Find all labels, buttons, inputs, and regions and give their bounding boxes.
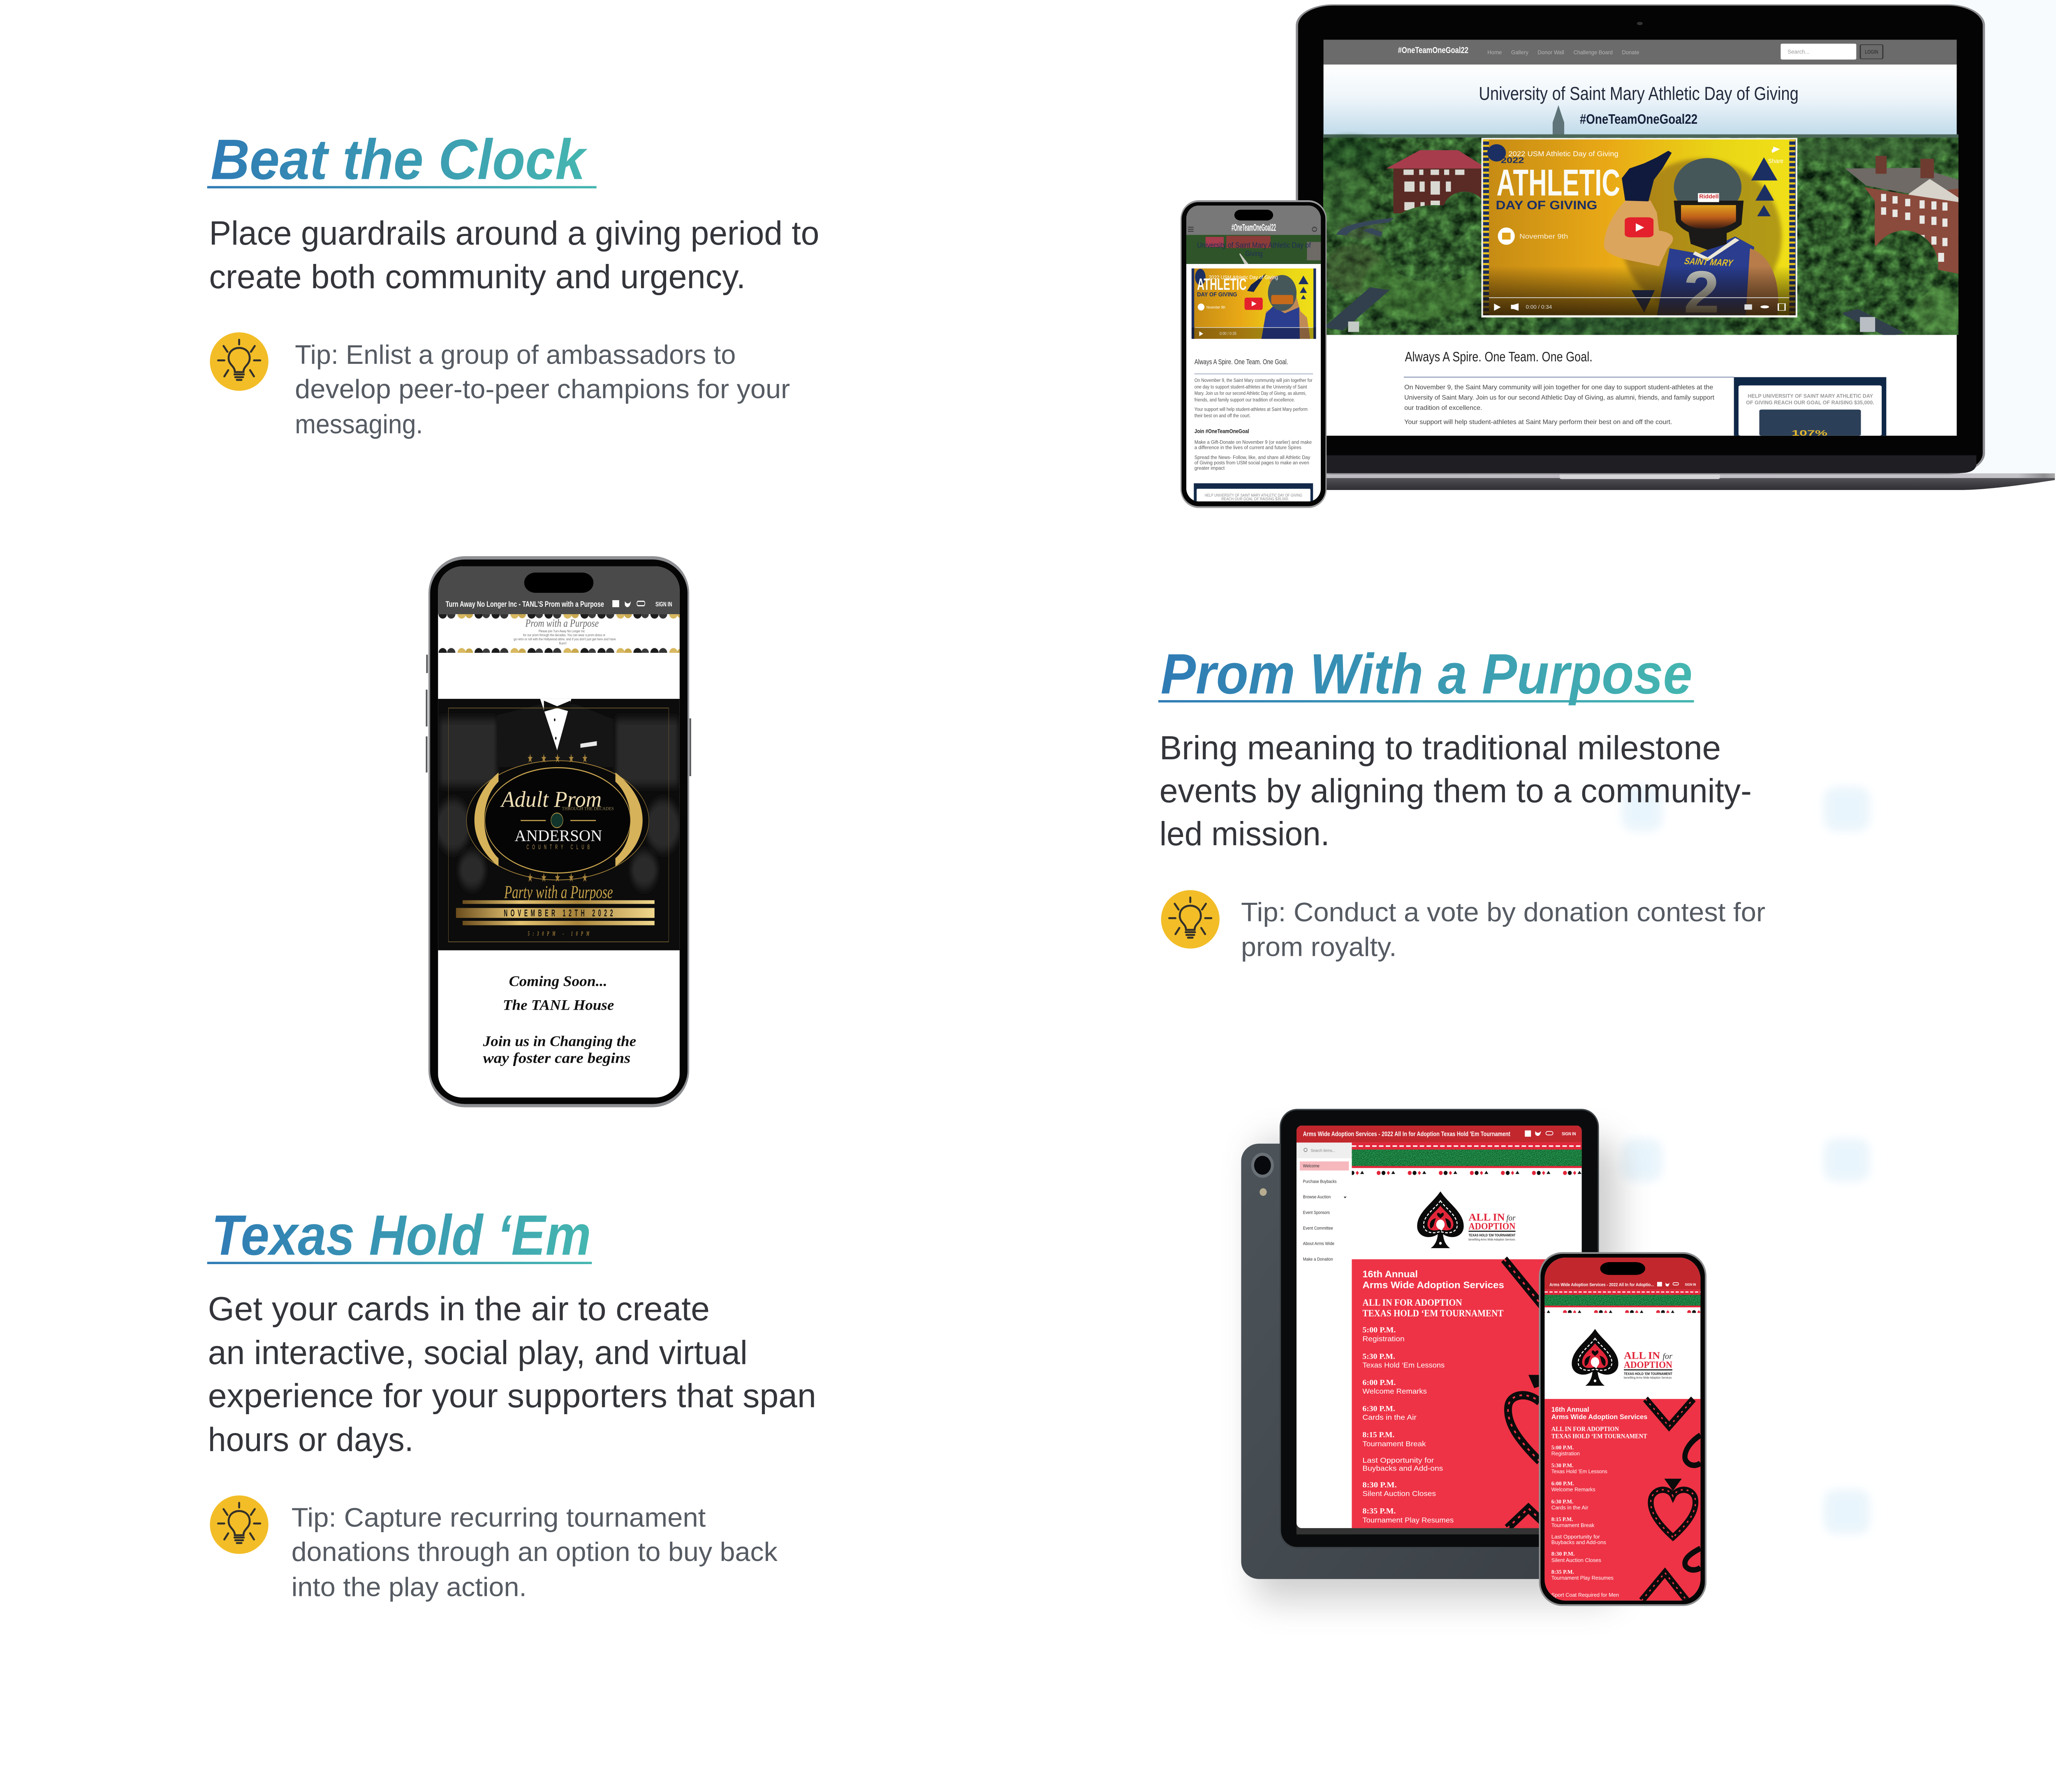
sidebar: About Arms Wide: [1303, 1241, 1334, 1246]
coming soon text: Join us in Changing the: [482, 1034, 637, 1050]
promo video player: 0:00 / 0:34: [1526, 304, 1552, 310]
website nav bar: Home: [1487, 49, 1502, 55]
body text: [208, 1290, 816, 1458]
mobile copy: greater impact: [1195, 466, 1225, 471]
left brick building: [1342, 150, 1482, 236]
event schedule panel: 8:30 P.M.: [1362, 1480, 1397, 1489]
front phone screen: [1544, 1258, 1700, 1600]
prom poster: Party with a Purpose: [504, 881, 613, 902]
decorative blue blur blob: [1622, 787, 1869, 1534]
page copy: On November 9, the Saint Mary community will join together for one day to support student-athletes at the: [1404, 384, 1713, 391]
player controls: [1489, 297, 1789, 298]
body text: an interactive, social play, and virtual: [208, 1334, 748, 1371]
phone logo: [1572, 1329, 1672, 1386]
icon: lightbulb: [1161, 890, 1220, 948]
event schedule panel: 8:35 P.M.: [1362, 1507, 1396, 1516]
gold ring emblem: ANDERSON: [514, 826, 602, 844]
body text: [209, 215, 819, 296]
mobile copy: Spread the News- Follow, like, and share all Athletic Day: [1195, 455, 1310, 460]
phone schedule panel: 6:30 P.M.: [1551, 1498, 1573, 1505]
dynamic island: [1600, 1262, 1645, 1275]
balloon banner: Prom with a Purpose: [525, 617, 599, 629]
gold ring emblem: ★★★★★: [527, 751, 588, 765]
triangles: [1632, 157, 1778, 312]
gold ring emblem: [467, 751, 649, 885]
hero sky and title: #OneTeamOneGoal22: [1580, 111, 1697, 127]
icon: lightbulb: [210, 332, 269, 391]
laptop mockup: [1297, 5, 2055, 490]
coming soon text: The TANL House: [503, 997, 614, 1013]
mobile video: 0:00 / 0:35: [1220, 331, 1236, 336]
tablet screen: [1297, 1126, 1582, 1528]
phone logo: for: [1662, 1352, 1672, 1361]
event schedule panel: Welcome Remarks: [1362, 1387, 1427, 1395]
mobile copy: Mary. Join us for our second Athletic Day of Giving, as alumni,: [1195, 391, 1306, 396]
icon: lightbulb: [210, 1496, 269, 1554]
football player: Riddell: [1699, 193, 1719, 200]
gold ring emblem: COUNTRY CLUB: [526, 843, 590, 851]
event schedule panel: ALL IN FOR ADOPTION: [1362, 1297, 1462, 1308]
heading underline: [207, 1262, 592, 1264]
website nav bar: LOGIN: [1865, 49, 1878, 55]
section: Beat the Clock: [207, 128, 819, 439]
event schedule panel: Last Opportunity for: [1362, 1456, 1434, 1464]
phone schedule panel: Tournament Break: [1551, 1522, 1595, 1528]
All In for Adoption logo: [1417, 1191, 1516, 1248]
mobile copy: Always A Spire. One Team. One Goal.: [1195, 358, 1288, 366]
body text: led mission.: [1160, 815, 1329, 853]
tip text: into the play action.: [292, 1572, 527, 1602]
foreground tree canopy: [1380, 171, 1938, 329]
event schedule panel: 6:30 P.M.: [1362, 1404, 1395, 1413]
page copy: HELP UNIVERSITY OF SAINT MARY ATHLETIC DAY: [1748, 393, 1873, 399]
mobile copy: HELP UNIVERSITY OF SAINT MARY ATHLETIC DAY OF GIVING: [1205, 493, 1302, 497]
prom poster: 5:30PM - 10PM: [528, 930, 589, 937]
event schedule panel: [1352, 1259, 1582, 1528]
promo video player: ATHLETIC: [1497, 162, 1620, 203]
date ribbon: NOVEMBER 12TH 2022: [504, 908, 613, 919]
event schedule panel: 5:00 P.M.: [1362, 1325, 1396, 1334]
phone schedule panel: Buybacks and Add-ons: [1551, 1540, 1606, 1545]
tip text: donations through an option to buy back: [292, 1537, 778, 1567]
phone logo: ALL IN: [1624, 1350, 1660, 1362]
promo video player: 2022 USM Athletic Day of Giving: [1508, 150, 1618, 158]
phone schedule panel: Cards in the Air: [1551, 1505, 1588, 1511]
felt banner: [1297, 1142, 1582, 1177]
heading: Texas Hold 'Em: Texas Hold ‘Em: [211, 1204, 591, 1267]
mobile video: DAY OF GIVING: [1197, 291, 1237, 298]
event schedule panel: 16th Annual: [1362, 1269, 1418, 1279]
phone schedule panel: ALL IN FOR ADOPTION: [1551, 1425, 1619, 1433]
phone schedule panel: Texas Hold ‘Em Lessons: [1551, 1468, 1607, 1474]
mobile video: [1192, 268, 1316, 339]
phone header: Arms Wide Adoption Services - 2022 All In for Adoptio...: [1549, 1282, 1654, 1288]
campus photo: [1312, 134, 1963, 336]
mobile copy: one day to support student-athletes at the University of Saint: [1195, 384, 1307, 390]
body text: events by aligning them to a community-: [1160, 772, 1752, 810]
promo video player: [1482, 138, 1797, 325]
phone schedule panel: Registration: [1551, 1451, 1580, 1457]
phone logo: TEXAS HOLD 'EM TOURNAMENT: [1624, 1372, 1672, 1376]
tablet header: [1297, 1126, 1582, 1142]
mobile copy: a difference in the lives of current and future Spires: [1195, 445, 1301, 451]
tip text: Tip: Capture recurring tournament: [292, 1503, 706, 1532]
tip text: [292, 1503, 778, 1602]
football player: [1604, 151, 1782, 325]
sidebar: Browse Auction: [1303, 1195, 1331, 1200]
body text: hours or days.: [208, 1421, 414, 1458]
event schedule panel: Texas Hold ‘Em Lessons: [1362, 1361, 1445, 1369]
body text: experience for your supporters that span: [208, 1377, 816, 1415]
front phone body: [1540, 1253, 1706, 1605]
tablet front: [1280, 1110, 1598, 1548]
phone schedule panel: 8:30 P.M.: [1551, 1551, 1574, 1557]
balloon banner: [438, 614, 680, 653]
hero sky and title: [1324, 65, 1957, 139]
page copy: 107%: [1792, 428, 1827, 437]
body text: Get your cards in the air to create: [208, 1290, 710, 1328]
All In for Adoption logo: ADOPTION: [1468, 1221, 1516, 1232]
balloon banner: for our prom through the decades. You can wear a prom dress or: [523, 634, 606, 637]
nav bar: Turn Away No Longer Inc - TANL'S Prom with a Purpose: [446, 600, 604, 609]
All In for Adoption logo: benefiting Arms Wide Adoption Services: [1468, 1237, 1515, 1242]
sidebar: Event Sponsors: [1303, 1210, 1330, 1215]
website nav bar: Donate: [1622, 49, 1639, 55]
phone schedule panel: Sport Coat Required for Men: [1551, 1592, 1619, 1598]
heading underline: [207, 186, 597, 188]
tuxedo: [497, 699, 614, 767]
football player: SAINT MARY: [1683, 256, 1734, 268]
promo video player: Share: [1768, 157, 1783, 164]
page copy: OF GIVING REACH OUR GOAL OF RAISING $35,000.: [1746, 399, 1874, 405]
pale blue backdrop beside laptop: [1951, 0, 2056, 474]
tip text: [295, 340, 790, 439]
right brick building: [1333, 156, 1959, 335]
mobile hero: [1186, 235, 1321, 264]
phone screen: [1186, 206, 1321, 503]
balloon banner: fun!: [559, 642, 567, 645]
nav bar: SIGN IN: [655, 601, 672, 608]
sidebar: Search items...: [1311, 1149, 1335, 1153]
event schedule panel: Registration: [1362, 1334, 1405, 1343]
mobile hero: Giving: [1245, 250, 1263, 258]
phone schedule panel: 16th Annual: [1551, 1406, 1589, 1413]
mobile copy: Make a Gift-Donate on November 9 (or earlier) and make: [1195, 440, 1312, 445]
event schedule panel: Silent Auction Closes: [1362, 1489, 1436, 1498]
event schedule panel: Tournament Play Resumes: [1362, 1516, 1454, 1524]
phone schedule panel: Welcome Remarks: [1551, 1487, 1595, 1492]
coming soon text: Coming Soon...: [509, 973, 607, 990]
page copy: Always A Spire. One Team. One Goal.: [1405, 349, 1593, 365]
event schedule panel: Arms Wide Adoption Services: [1362, 1280, 1504, 1290]
event schedule panel: TEXAS HOLD ‘EM TOURNAMENT: [1362, 1308, 1504, 1318]
tablet header: SIGN IN: [1562, 1131, 1576, 1137]
phone body: [1181, 201, 1326, 507]
page copy: our tradition of excellence.: [1404, 404, 1482, 412]
coming soon text: way foster care begins: [483, 1050, 630, 1066]
balloon banner: go retro or roll with the Hollywood attire, and if you don't just get here and have: [514, 638, 616, 641]
phone body: [429, 558, 688, 1105]
event schedule panel: 6:00 P.M.: [1362, 1378, 1396, 1387]
heading: Beat the Clock: Beat the Clock: [211, 128, 588, 191]
event schedule panel: 8:15 P.M.: [1362, 1430, 1394, 1439]
phone schedule panel: [1544, 1399, 1700, 1600]
event schedule panel: 5:30 P.M.: [1362, 1352, 1395, 1361]
mobile copy: On November 9, the Saint Mary community will join together for: [1195, 378, 1313, 383]
phone schedule panel: Silent Auction Closes: [1551, 1557, 1601, 1563]
mobile hero: University of Saint Mary Athletic Day of: [1197, 241, 1311, 250]
event schedule panel: Tournament Break: [1362, 1440, 1426, 1448]
balloon banner: Please join Turn Away No Longer Inc: [539, 630, 585, 633]
section: Texas Hold 'Em: [207, 1204, 816, 1602]
All In for Adoption logo: ALL IN: [1468, 1212, 1505, 1223]
tip text: develop peer-to-peer champions for your: [295, 375, 790, 404]
mobile video: November 9th: [1206, 305, 1225, 310]
All In for Adoption logo: TEXAS HOLD 'EM TOURNAMENT: [1468, 1233, 1515, 1237]
phone header: [1544, 1258, 1700, 1290]
dynamic island: [524, 573, 593, 593]
play button: [1625, 217, 1653, 237]
small phone mockup: athletic day: [1181, 201, 1326, 507]
tablet back: [1241, 1144, 1565, 1579]
tablet and phone mockup: Texas Hold 'Em: [1241, 1110, 1706, 1605]
tip text: [1241, 897, 1765, 962]
website nav bar: Challenge Board: [1573, 49, 1613, 55]
phone felt banner: [1544, 1290, 1700, 1313]
phone logo: ADOPTION: [1624, 1360, 1672, 1370]
football player: 2: [1683, 259, 1720, 325]
page copy: Your support will help student-athletes at Saint Mary perform their best on and off the court.: [1404, 419, 1672, 425]
soft drop shadow: [1253, 1141, 1619, 1600]
tip text: prom royalty.: [1241, 932, 1397, 962]
dynamic island: [1234, 210, 1273, 220]
coming soon text: [482, 973, 637, 1066]
laptop base: [1313, 474, 2055, 490]
phone schedule panel: Last Opportunity for: [1551, 1534, 1600, 1540]
mobile nav: [1186, 206, 1321, 235]
phone schedule panel: 8:15 P.M.: [1551, 1516, 1573, 1522]
phone schedule panel: 6:00 P.M.: [1551, 1480, 1574, 1487]
mobile copy: friends, and family support our tradition of excellence.: [1195, 398, 1295, 403]
mobile video: 2022 USM Athletic Day of Giving: [1209, 275, 1278, 280]
heading underline: [1158, 700, 1694, 703]
laptop hero photo: [1312, 134, 1963, 336]
website nav bar: #OneTeamOneGoal22: [1398, 45, 1468, 55]
website nav bar: Gallery: [1511, 49, 1528, 55]
phone screen: [436, 567, 680, 1098]
promo video player: DAY OF GIVING: [1496, 199, 1597, 212]
sidebar: Welcome: [1303, 1163, 1320, 1169]
website nav bar: [1324, 40, 1957, 65]
mobile nav: #OneTeamOneGoal22: [1232, 222, 1276, 234]
phone schedule panel: 5:00 P.M.: [1551, 1444, 1574, 1451]
date ribbon: [456, 900, 655, 925]
phone logo: benefiting Arms Wide Adoption Services: [1624, 1376, 1672, 1380]
page copy: University of Saint Mary. Join us for our second Athletic Day of Giving, as alumni, friends, and family support: [1404, 394, 1714, 401]
sidebar: [1297, 1142, 1352, 1528]
section: Prom With a Purpose: [1158, 643, 1765, 962]
laptop lid: [1297, 5, 1984, 474]
body text: [1160, 729, 1752, 853]
mobile video: ATHLETIC: [1197, 276, 1246, 294]
page copy: [1324, 335, 1957, 437]
gold ring emblem: ★★★★★: [527, 871, 588, 885]
mobile copy: of Giving posts from USM social pages to make an even: [1195, 460, 1309, 466]
heading: Prom With a Purpose: Prom With a Purpose: [1161, 643, 1692, 706]
event schedule panel: Buybacks and Add-ons: [1362, 1464, 1443, 1473]
promo video player: November 9th: [1519, 232, 1568, 240]
mobile copy: Join #OneTeamOneGoal: [1195, 428, 1249, 435]
mobile copy: their best on and off the court.: [1195, 414, 1250, 419]
phone header: SIGN IN: [1685, 1283, 1696, 1287]
tablet header: Arms Wide Adoption Services - 2022 All In for Adoption Texas Hold 'Em Tournament: [1303, 1131, 1510, 1138]
sidebar: Purchase Buybacks: [1303, 1179, 1336, 1184]
website nav bar: Donor Wall: [1537, 49, 1564, 55]
tip text: Tip: Enlist a group of ambassadors to: [295, 340, 736, 370]
sidebar: Make a Donation: [1303, 1257, 1333, 1262]
prom poster: [436, 699, 680, 950]
phone schedule panel: Arms Wide Adoption Services: [1551, 1413, 1647, 1421]
body text: Place guardrails around a giving period to: [209, 215, 819, 252]
phone schedule panel: 8:35 P.M.: [1551, 1569, 1574, 1575]
gold ring emblem: THROUGH THE DECADES: [562, 807, 614, 812]
mobile copy: [1194, 358, 1313, 503]
All In for Adoption logo: for: [1506, 1214, 1516, 1223]
website nav bar: Search...: [1787, 49, 1810, 55]
body text: create both community and urgency.: [209, 258, 746, 296]
promo video player: 2022: [1501, 156, 1524, 165]
mobile copy: Your support will help student-athletes at Saint Mary perform: [1195, 407, 1308, 412]
event schedule panel: Cards in the Air: [1362, 1413, 1417, 1422]
sidebar: Event Committee: [1303, 1226, 1333, 1231]
body text: Bring meaning to traditional milestone: [1160, 729, 1721, 767]
phone schedule panel: Tournament Play Resumes: [1551, 1575, 1614, 1581]
mobile copy: REACH OUR GOAL OF RAISING $35,000.: [1221, 497, 1289, 502]
phone schedule panel: 5:30 P.M.: [1551, 1462, 1573, 1468]
gold ring emblem: Adult Prom: [500, 786, 602, 812]
phone schedule panel: TEXAS HOLD ‘EM TOURNAMENT: [1551, 1433, 1647, 1440]
side buttons: [427, 654, 690, 776]
nav bar: [438, 567, 680, 614]
tip text: Tip: Conduct a vote by donation contest for: [1241, 897, 1765, 927]
ornate frame: [448, 708, 669, 942]
tip text: messaging.: [295, 409, 423, 439]
tall phone mockup: prom: [427, 558, 690, 1105]
